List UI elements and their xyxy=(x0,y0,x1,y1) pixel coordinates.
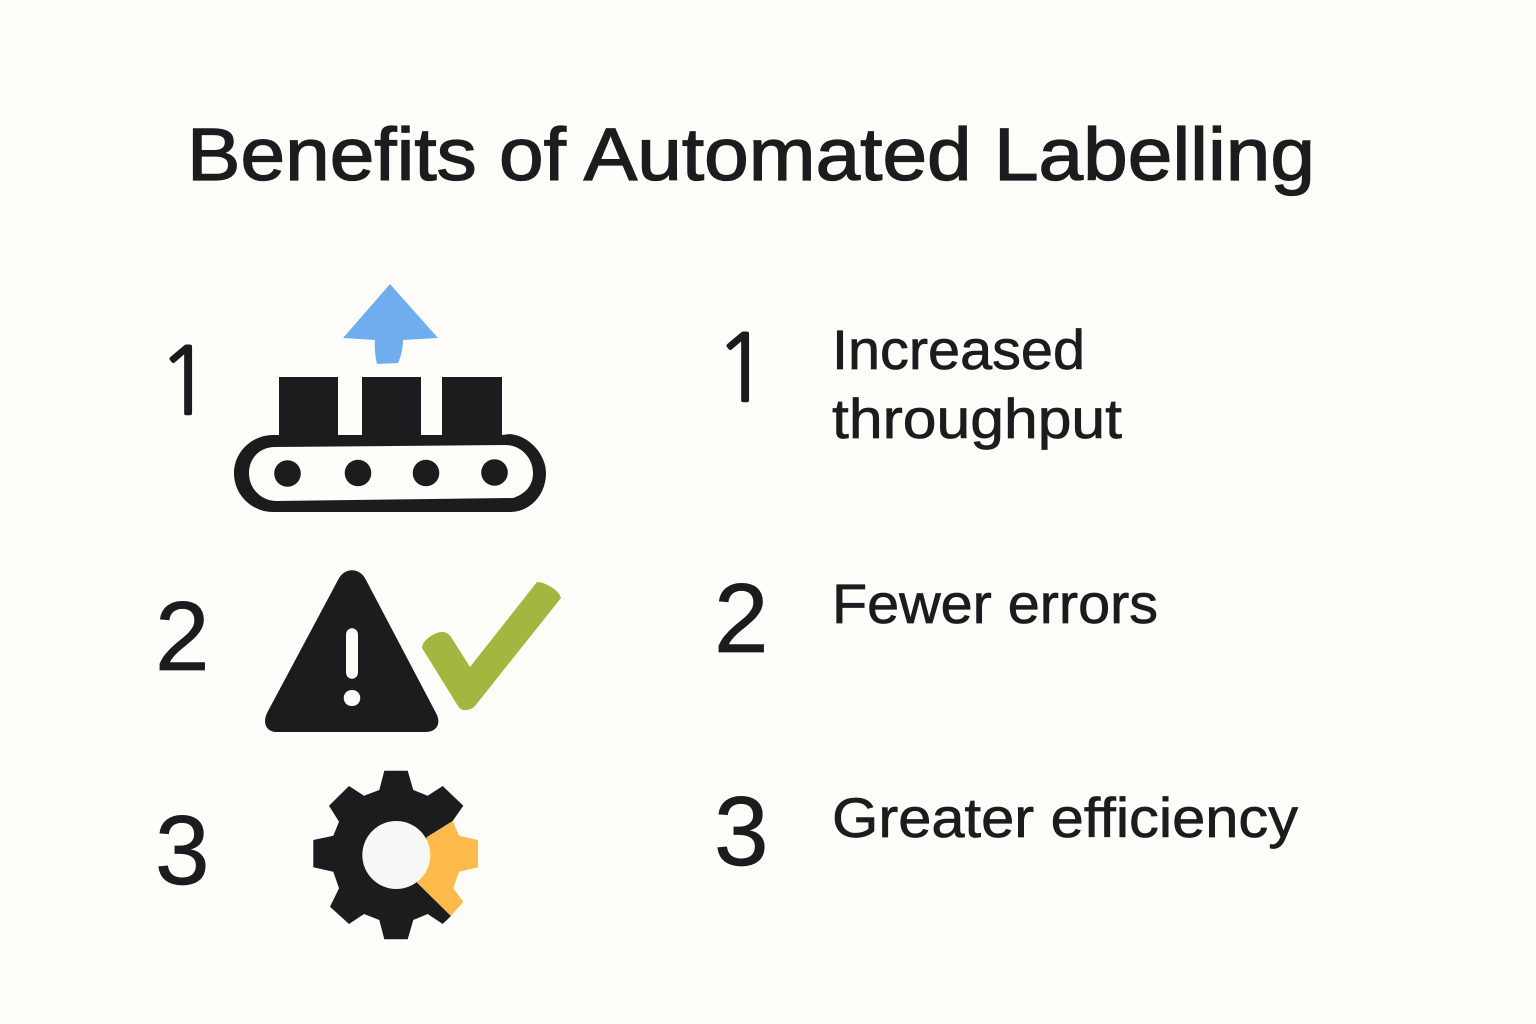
icon: conveyor belt with up arrow xyxy=(234,284,546,512)
gear centre hole xyxy=(362,821,430,889)
number 3, right column: 3 xyxy=(714,776,769,886)
icon: warning triangle xyxy=(265,570,438,732)
label: Increased throughput xyxy=(832,318,1122,450)
icon: warning triangle with check mark xyxy=(265,570,561,732)
number 2, right column: 2 xyxy=(714,563,769,673)
label: Greater efficiency: Greater efficiency xyxy=(832,786,1298,849)
icon: green check mark xyxy=(422,582,561,710)
number 1, right column: 1 xyxy=(714,322,770,415)
icon: belt rollers xyxy=(274,459,508,487)
icon: conveyor belt xyxy=(234,434,546,512)
number 1, left column: 1 xyxy=(157,335,213,428)
icon: gear xyxy=(313,771,478,939)
label: Increased throughput: throughput xyxy=(832,387,1122,450)
title: Benefits of Automated Labelling xyxy=(187,113,1315,196)
label: Increased throughput: Increased xyxy=(832,318,1085,381)
gear black body xyxy=(313,771,463,939)
label: Fewer errors: Fewer errors xyxy=(832,572,1158,635)
gear orange segment xyxy=(417,821,478,916)
number 3, left column: 3 xyxy=(155,795,210,905)
icon: blue up arrow xyxy=(343,284,438,364)
number 2, left column: 2 xyxy=(155,581,210,691)
icon: three boxes xyxy=(279,377,502,436)
